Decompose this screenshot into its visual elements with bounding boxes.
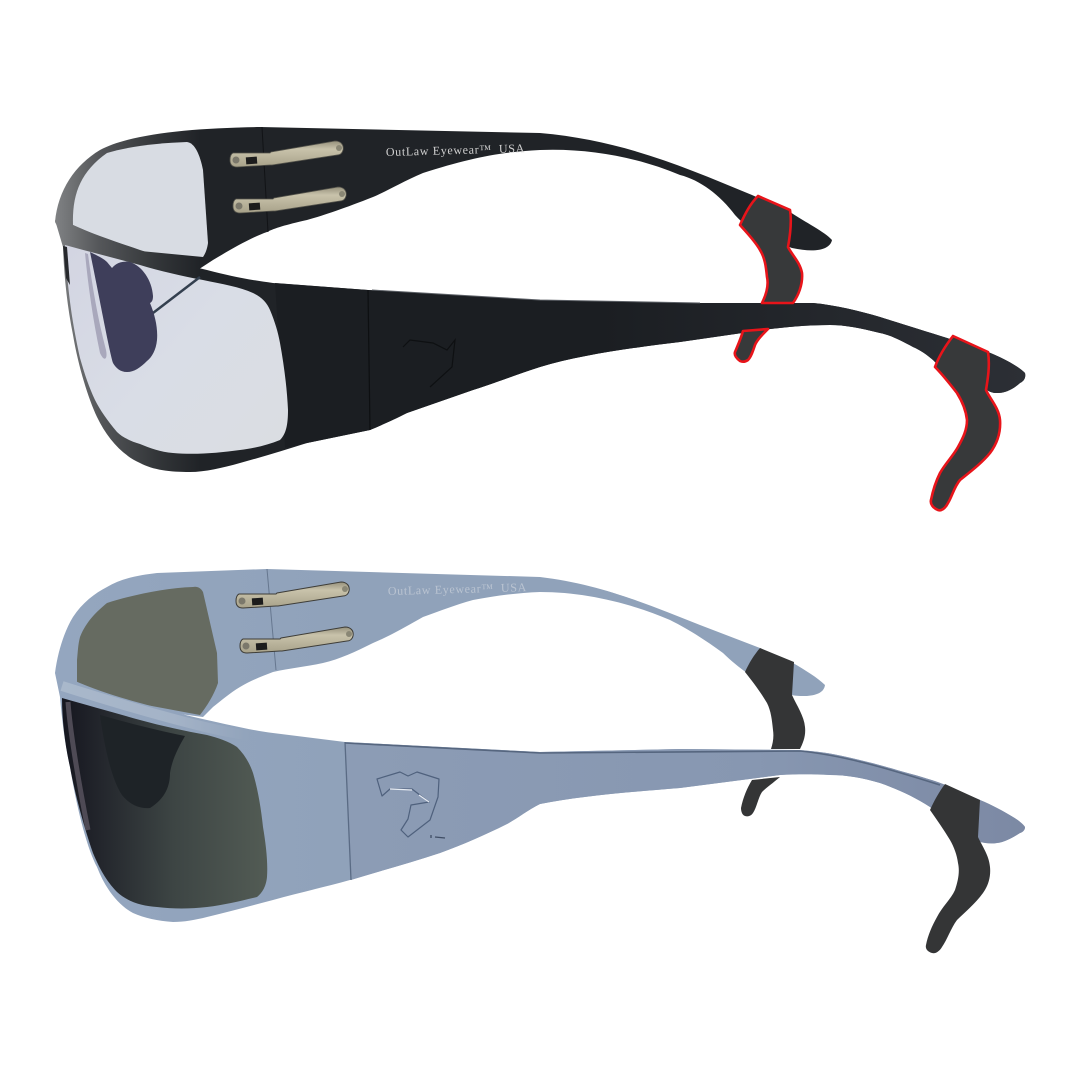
nose pad silhouette [100,715,185,808]
far lens, smoke [77,587,218,715]
near lens, smoke [62,698,267,908]
near frame and temple, silver [55,673,1025,922]
shield logo, embossed faint [403,340,455,387]
far temple top highlight [355,570,660,607]
rim light band [62,686,250,736]
far lens, clear [73,142,208,257]
near temple overlay, solid black [275,283,1025,448]
ear hook far, lower piece [741,777,780,816]
far temple arm, silver [55,569,825,717]
near temple panel, silver [345,742,1025,880]
nose pad [90,252,157,372]
far temple hinge seam [262,127,268,232]
ear hook near, red outline [931,336,1000,510]
ear hook far, red outline, upper piece [740,196,802,303]
top edge highlight [345,743,940,785]
brand text, silver temple: OutLaw Eyewear™ USA [388,580,527,598]
ear hook far, red outline, lower piece [735,329,768,362]
ear hook near [926,784,990,953]
hinge upper, silver frame [236,582,349,608]
top edge highlight [372,290,700,303]
far temple hinge seam [267,569,276,670]
hinge lower, black frame [233,187,346,213]
shield logo, embossed [377,772,445,838]
black glasses with clear lenses [55,127,1025,510]
lens left streak [68,702,88,830]
temple seam at front piece [345,742,351,880]
brand text, black temple: OutLaw Eyewear™ USA [386,141,525,159]
left rim dark sliver [63,246,70,285]
ear hook far, upper piece [745,648,805,749]
near frame and temple, black [55,220,1025,472]
silver glasses with smoke lenses [55,569,1025,953]
hinge upper, black frame [230,141,343,167]
near lens, clear [65,245,288,454]
hinge lower, silver frame [240,627,353,653]
far temple arm, black [55,127,832,275]
lens reflection strip [85,253,107,359]
temple seam at front piece [368,290,370,430]
nose arm wire [153,277,200,313]
